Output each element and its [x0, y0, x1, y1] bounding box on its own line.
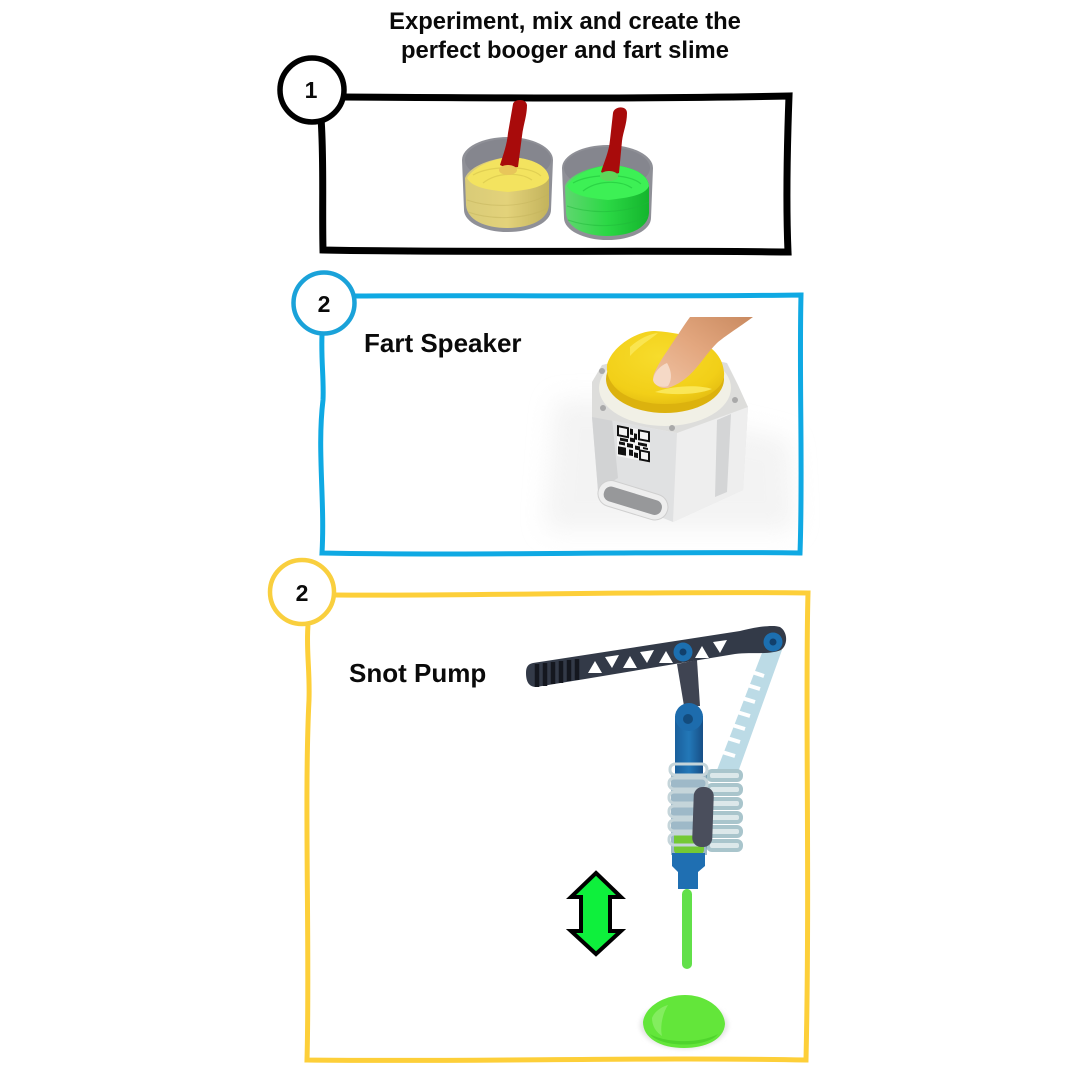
- heading: Snot Pump: Snot Pump: [349, 658, 486, 688]
- step badge 1: 1: [305, 77, 318, 103]
- QR code: [617, 425, 650, 462]
- step badge 1: [280, 58, 344, 122]
- yellow slime cup: [462, 100, 553, 232]
- rear spring: [708, 771, 741, 850]
- green slime blob: [640, 995, 728, 1049]
- dark clip: [692, 787, 714, 847]
- title: Experiment, mix and create the: [389, 8, 741, 35]
- green slime cup: [562, 107, 653, 240]
- title: perfect booger and fart slime: [401, 37, 729, 64]
- blue pump tube: [671, 703, 707, 855]
- heading: Fart Speaker: Fart Speaker: [364, 328, 522, 358]
- step badge 2: [270, 560, 334, 624]
- green slime stream: [682, 889, 692, 969]
- green double-headed arrow: [571, 873, 621, 954]
- translucent link arm: [717, 645, 782, 775]
- panel 3: snot pump: [270, 560, 808, 1060]
- icon: snot pump: [526, 626, 786, 1049]
- panel 1: slime cups: [280, 58, 789, 252]
- lever handle: [526, 626, 786, 687]
- panel 2 frame: [321, 295, 801, 554]
- finger: [653, 317, 753, 388]
- front spring: [669, 764, 707, 845]
- panel 2: fart speaker: [294, 272, 801, 554]
- title: [389, 8, 741, 64]
- panel 3 frame: [307, 593, 808, 1060]
- slot: [595, 477, 671, 523]
- blue lever bolts: [674, 632, 782, 662]
- soft photo background: [545, 400, 795, 530]
- panel 1 frame: [321, 96, 789, 252]
- dark connector: [677, 660, 700, 706]
- icon: speaker button with finger: [592, 317, 753, 523]
- spoon: [500, 100, 527, 168]
- blue nozzle: [672, 853, 705, 889]
- yellow button: [606, 331, 724, 413]
- step badge 2: 2: [318, 291, 330, 317]
- speaker body: [592, 350, 748, 523]
- spoon: [601, 107, 627, 174]
- step badge 2: [294, 272, 354, 334]
- green slime inside: [674, 832, 704, 854]
- step badge 2: 2: [296, 580, 308, 606]
